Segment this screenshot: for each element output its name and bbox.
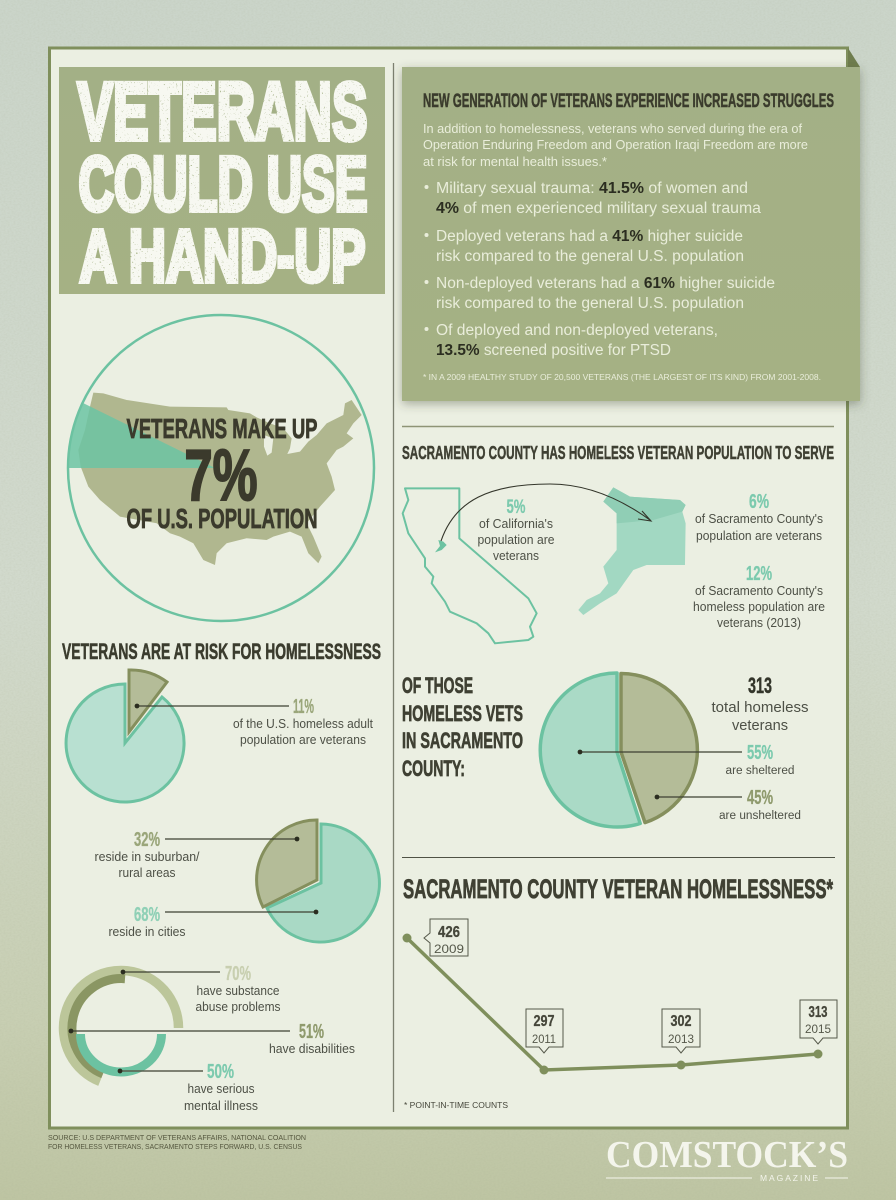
heading: COUNTY: bbox=[402, 756, 465, 781]
data label: 2011: 297 bbox=[534, 1013, 555, 1030]
intro paragraph bbox=[423, 122, 808, 169]
stat: 5%: veterans bbox=[493, 549, 539, 563]
data label: 2015: 2015 bbox=[805, 1022, 831, 1036]
section: of those homeless vets: veterans bbox=[732, 718, 788, 734]
icon: US map bbox=[78, 393, 362, 565]
data label: 2009: 426 bbox=[438, 924, 460, 941]
pie chart: 32% / 68%: rural areas bbox=[118, 866, 176, 880]
stat: 5%: of California's bbox=[479, 517, 553, 531]
bullet list: risk compared to the general U.S. population bbox=[436, 295, 744, 312]
arrow: from state to county bbox=[441, 484, 651, 541]
callout lines bbox=[580, 751, 742, 753]
bullet list: Deployed veterans had a 41% higher suicide bbox=[436, 228, 743, 245]
stat: 5%: 5% bbox=[506, 497, 526, 518]
label: 50%: 50% bbox=[207, 1061, 234, 1083]
pie chart: sheltered bbox=[540, 673, 640, 827]
section: line chart bbox=[402, 858, 837, 1110]
source note bbox=[48, 1133, 306, 1151]
icon: Sacramento County shape bbox=[578, 487, 686, 615]
data label: 2013 bbox=[662, 1009, 700, 1053]
heading: at risk: VETERANS ARE AT RISK FOR HOMELESSNESS bbox=[62, 639, 381, 664]
section: of those homeless vets bbox=[402, 673, 808, 827]
bullet list: Of deployed and non-deployed veterans, bbox=[436, 322, 718, 339]
title text: A HAND-UP bbox=[80, 214, 366, 298]
callout lines bbox=[165, 838, 297, 840]
data label: 2013: 302 bbox=[670, 1013, 692, 1030]
callout lines bbox=[123, 971, 220, 973]
map label: 7% bbox=[184, 436, 258, 516]
description: have disabilities bbox=[269, 1042, 355, 1056]
source note: SOURCE: U.S DEPARTMENT OF VETERANS AFFAIRS, NATIONAL COALITION bbox=[48, 1133, 306, 1142]
pie chart: 11% bbox=[66, 670, 374, 802]
ring chart: 70 / 51 / 50: abuse problems bbox=[196, 1000, 280, 1014]
icon: California outline bbox=[403, 488, 537, 643]
ring chart: 70 / 51 / 50 bbox=[64, 963, 355, 1113]
stat: 12%: of Sacramento County's bbox=[695, 584, 823, 598]
section: Sacramento County population bbox=[402, 426, 834, 643]
bullet list: 13.5% screened positive for PTSD bbox=[436, 342, 671, 359]
total: 313 bbox=[748, 673, 772, 698]
description: reside in suburban/ bbox=[94, 850, 200, 864]
stat: 12% bbox=[693, 563, 825, 630]
heading: OF THOSE bbox=[402, 673, 473, 698]
bullet list: risk compared to the general U.S. population bbox=[436, 248, 744, 265]
stat: 6%: population are veterans bbox=[696, 529, 822, 543]
label: 68%: 68% bbox=[134, 904, 160, 926]
title text: VETERANS bbox=[78, 66, 368, 158]
stat: 5%: population are bbox=[478, 533, 555, 547]
description: have serious bbox=[188, 1082, 254, 1096]
label: 45%: 45% bbox=[747, 787, 773, 809]
total description: total homeless bbox=[712, 700, 808, 716]
label: 55%: 55% bbox=[747, 742, 773, 764]
stat: 5% bbox=[478, 497, 555, 563]
logo: Comstock's Magazine: MAGAZINE bbox=[760, 1173, 818, 1183]
folded corner bbox=[848, 48, 860, 67]
label: 70%: 70% bbox=[225, 963, 251, 985]
label: 32%: 32% bbox=[134, 829, 160, 851]
pie chart: 11%: population are veterans bbox=[240, 733, 366, 747]
map label bbox=[126, 413, 318, 534]
bullet list: Non-deployed veterans had a 61% higher suicide bbox=[436, 275, 775, 292]
data label: 2009: 2009 bbox=[434, 942, 464, 956]
map label: VETERANS MAKE UP bbox=[126, 413, 318, 444]
data label: 2009 bbox=[424, 919, 468, 956]
description: of the U.S. homeless adult bbox=[233, 717, 374, 731]
icon: county shading bbox=[603, 487, 686, 523]
heading: IN SACRAMENTO bbox=[402, 728, 523, 753]
intro paragraph: at risk for mental health issues.* bbox=[423, 155, 607, 169]
description: are sheltered bbox=[726, 765, 794, 777]
bullet list bbox=[424, 180, 775, 359]
stat: 6%: of Sacramento County's bbox=[695, 512, 823, 526]
panel: title bbox=[59, 66, 385, 298]
circle outline bbox=[68, 315, 374, 621]
data label: 2011 bbox=[526, 1009, 563, 1053]
stat: 12%: veterans (2013) bbox=[717, 616, 801, 630]
description: are unsheltered bbox=[719, 810, 801, 822]
source note: FOR HOMELESS VETERANS, SACRAMENTO STEPS FORWARD, U.S. CENSUS bbox=[48, 1142, 302, 1151]
bullet list: Military sexual trauma: 41.5% of women and bbox=[436, 180, 748, 197]
logo: Comstock's Magazine: COMSTOCK’S bbox=[606, 1134, 848, 1176]
ring chart: 70 / 51 / 50: mental illness bbox=[184, 1099, 258, 1113]
title text bbox=[78, 66, 368, 298]
trend line bbox=[407, 938, 818, 1070]
circle chart: veterans 7% of US population bbox=[68, 315, 374, 621]
callout line bbox=[137, 705, 289, 707]
intro paragraph: In addition to homelessness, veterans who served during the era of bbox=[423, 122, 803, 136]
label: 11%: 11% bbox=[293, 696, 314, 718]
panel: new generation of veterans bbox=[402, 48, 860, 401]
map label: OF U.S. POPULATION bbox=[126, 503, 318, 534]
stat: 12%: homeless population are bbox=[693, 600, 825, 614]
data label: 2013: 2013 bbox=[668, 1032, 694, 1046]
description: reside in cities bbox=[108, 925, 186, 939]
icon: Lake Michigan bbox=[264, 435, 273, 456]
chart footnote: * POINT-IN-TIME COUNTS bbox=[404, 1100, 508, 1110]
title text: COULD USE bbox=[78, 142, 368, 228]
intro paragraph: Operation Enduring Freedom and Operation Iraqi Freedom are more bbox=[423, 138, 808, 152]
pie chart: 32% / 68% bbox=[94, 820, 379, 942]
vertical column divider bbox=[392, 63, 394, 1112]
panel footnote: * IN A 2009 HEALTHY STUDY OF 20,500 VETERANS (THE LARGEST OF ITS KIND) FROM 2001-2008. bbox=[423, 372, 821, 382]
heading bbox=[402, 673, 523, 781]
data label: 2011: 2011 bbox=[532, 1032, 556, 1046]
data label: 2015 bbox=[800, 1000, 837, 1044]
description: have substance bbox=[196, 984, 280, 998]
bullet list: 4% of men experienced military sexual trauma bbox=[436, 200, 761, 217]
7% wedge bbox=[68, 403, 215, 468]
stat: 6% bbox=[695, 491, 823, 543]
pie chart: unsheltered bbox=[621, 674, 697, 823]
stat: 12%: 12% bbox=[746, 563, 772, 585]
icon: county marker bbox=[435, 540, 447, 552]
heading: HOMELESS VETS bbox=[402, 701, 523, 726]
stat: 6%: 6% bbox=[749, 491, 769, 513]
data label: 2015: 313 bbox=[808, 1004, 828, 1021]
label: 51%: 51% bbox=[299, 1021, 324, 1043]
